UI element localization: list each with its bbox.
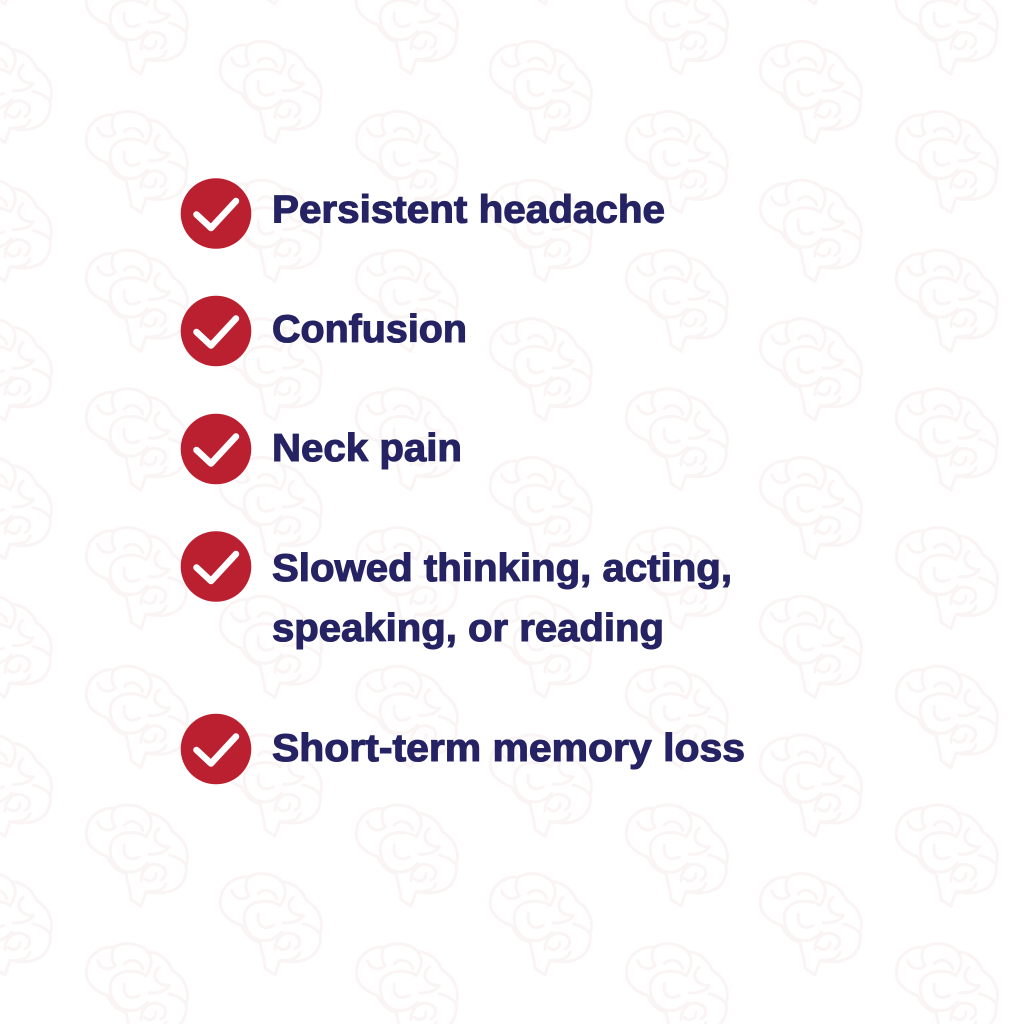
label: Confusion [272,308,467,351]
label: Persistent headache [272,188,665,232]
icon: check mark [181,714,251,784]
icon: check mark [181,178,251,249]
label line 2: speaking, or reading [272,607,664,650]
label: Neck pain [272,427,462,470]
icon: check mark [181,296,251,366]
label line 1: Slowed thinking, acting, [272,547,732,590]
label: Short-term memory loss [272,727,745,770]
checklist item: short-term memory loss [181,714,745,784]
checklist item: slowed thinking [181,531,732,650]
icon: check mark [181,414,251,484]
checklist item: persistent headache [181,178,665,249]
checklist item: confusion [181,296,467,366]
icon: check mark [181,531,251,602]
checklist item: neck pain [181,414,462,484]
